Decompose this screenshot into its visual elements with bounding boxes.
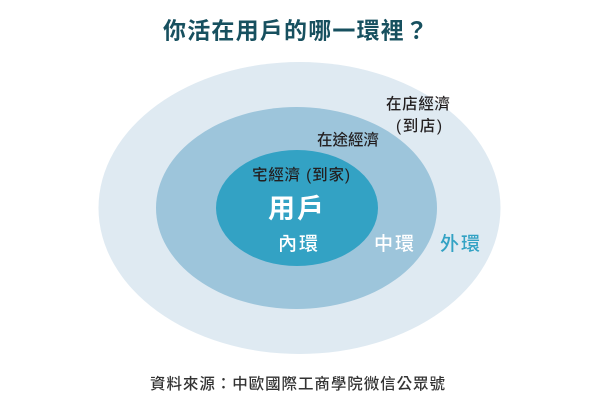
label: user: 用戶 [268,194,324,224]
label: on-the-way economy: 在途經濟 [317,130,379,149]
label: inner ring: 內環 [278,234,318,255]
source note: 資料來源：中歐國際工商學院微信公眾號 [150,374,445,393]
label: middle ring: 中環 [374,233,414,255]
label: outer ring: 外環 [440,233,480,255]
middle ring [156,107,437,309]
label: in-store economy [386,95,450,135]
label: in-store economy: 在店經濟 [386,95,450,113]
inner ring [216,150,378,266]
label: stay-at-home economy: 宅經濟 (到家) [252,165,350,184]
outer ring [98,62,500,354]
title: 你活在用戶的哪一環裡？ [163,18,428,44]
label: in-store economy: (到店) [396,117,442,135]
